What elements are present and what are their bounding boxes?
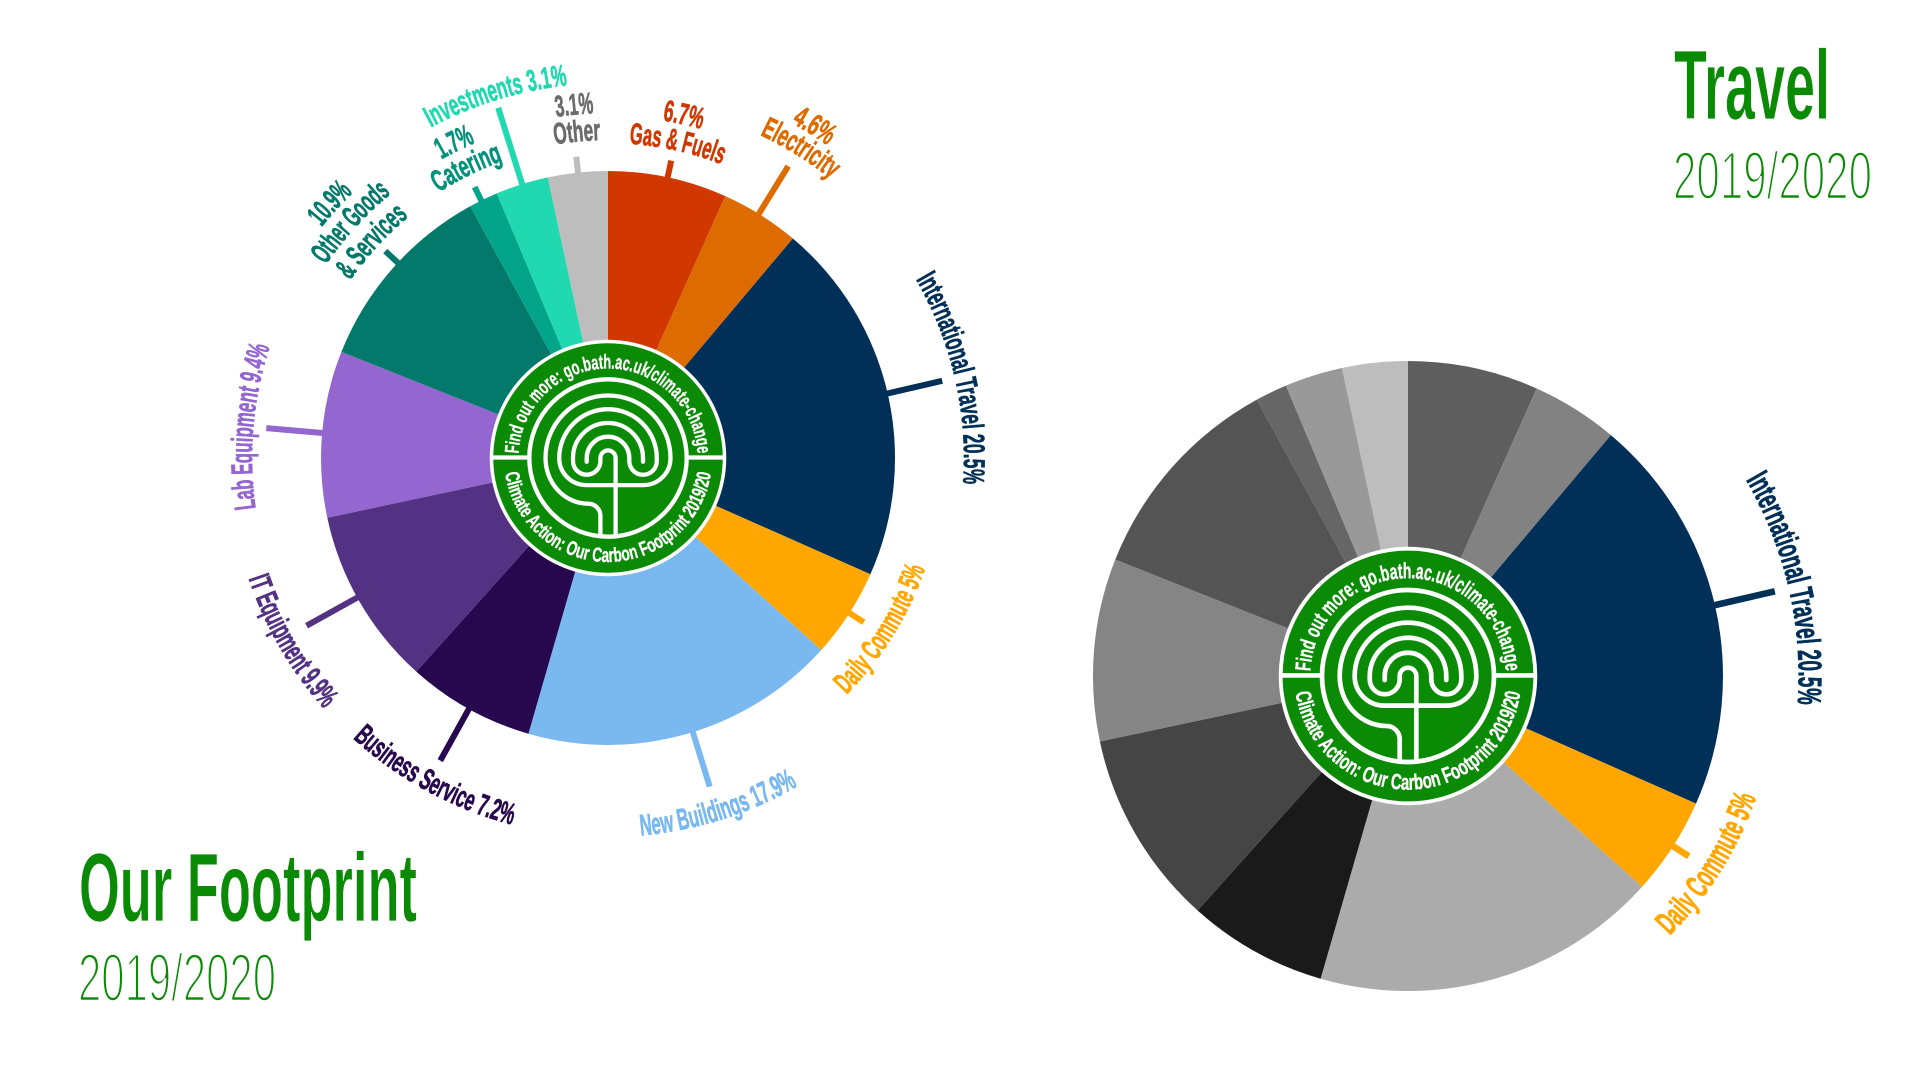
label: other: Other — [554, 120, 600, 144]
tick: daily commute — [848, 612, 864, 622]
badge disc — [1281, 549, 1535, 803]
label: international travel: International Travel 20.5% — [916, 270, 986, 484]
slice: lab equipment — [321, 352, 608, 518]
slice: investments — [497, 177, 608, 458]
label: electricity: 4.6% — [794, 107, 837, 144]
label: gas and fuels: 6.7% — [664, 100, 704, 129]
slice: business service grey — [1198, 676, 1408, 979]
subtitle: 2019/2020 left: 2019/2020 — [78, 940, 276, 1016]
slice: other goods grey — [1115, 400, 1408, 676]
tick: investments — [498, 108, 523, 186]
labels and ticks: our footprint — [230, 64, 986, 836]
tick: daily commute — [1671, 845, 1689, 856]
label: catering: Catering — [430, 146, 503, 190]
slice: electricity — [608, 196, 793, 458]
slice: investments grey — [1286, 368, 1408, 676]
title: Our Footprint: Our Footprint — [79, 833, 417, 942]
slice: electricity grey — [1408, 388, 1611, 676]
tick: international travel — [886, 381, 942, 394]
slice: daily commute — [608, 458, 870, 650]
tick: electricity — [758, 166, 788, 216]
badge: right labyrinth roundel — [1278, 546, 1538, 806]
slice: other grey — [1342, 361, 1408, 676]
label: investments: Investments 3.1% — [422, 64, 567, 128]
labyrinth icon — [493, 379, 723, 537]
slice: daily commute — [1408, 676, 1696, 887]
slice: international travel — [1408, 435, 1723, 804]
chart: our footprint donut — [321, 171, 895, 745]
label: gas and fuels: Gas & Fuels — [630, 123, 726, 164]
label: other goods and services: Other Goods — [311, 183, 390, 262]
labels and ticks: travel — [1654, 469, 1822, 936]
label: catering — [430, 124, 503, 190]
tick: other goods and services — [385, 251, 399, 264]
slice: new buildings grey — [1321, 676, 1642, 991]
badge disc — [492, 342, 724, 574]
tick: catering — [475, 187, 482, 202]
badge text bottom: Climate Action: Our Carbon Footprint 2019/20 — [506, 472, 711, 562]
label: business service: Business Service 7.2% — [353, 723, 516, 824]
label: other: 3.1% — [554, 92, 594, 117]
label: other — [554, 92, 600, 144]
slice: other — [548, 171, 608, 458]
slice: other goods and services — [341, 206, 608, 458]
slice: international travel — [608, 238, 895, 574]
slice: new buildings — [528, 458, 821, 745]
slice: gas and fuels — [608, 171, 725, 458]
slice: business service — [416, 458, 608, 734]
tick: lab equipment — [266, 428, 324, 433]
label: lab equipment: Lab Equipment 9.4% — [230, 343, 270, 510]
slice: IT equipment — [327, 458, 608, 672]
slice: IT equipment grey — [1100, 676, 1408, 910]
label: daily commute: Daily Commute 5% — [1654, 792, 1756, 936]
label: international travel: International Travel 20.5% — [1746, 469, 1822, 704]
tick: new buildings — [692, 730, 710, 787]
slice: catering grey — [1257, 386, 1408, 676]
label: catering: 1.7% — [434, 124, 474, 160]
badge text top: Find out more: go.bath.ac.uk/climate-change — [504, 354, 708, 454]
label: gas and fuels — [630, 100, 726, 164]
badge text top: Find out more: go.bath.ac.uk/climate-change — [1295, 562, 1518, 671]
label: IT equipment: IT Equipment 9.9% — [248, 572, 338, 708]
tick: business service — [440, 707, 470, 761]
slice: gas and fuels grey — [1408, 361, 1537, 676]
slice: catering — [470, 193, 608, 458]
tick: IT equipment — [307, 597, 359, 626]
tick: gas and fuels — [667, 161, 671, 179]
chart: travel donut — [1093, 361, 1723, 991]
slice: lab equipment grey — [1093, 560, 1408, 742]
tick: other — [576, 157, 578, 175]
label: other goods and services: 10.9% — [308, 180, 352, 227]
label: other goods and services: & Services — [336, 206, 407, 278]
badge: left labyrinth roundel — [490, 340, 726, 576]
label: daily commute: Daily Commute 5% — [832, 564, 925, 694]
label: electricity: Electricity — [760, 116, 841, 180]
tick: international travel — [1713, 591, 1775, 606]
labyrinth icon — [1282, 590, 1534, 762]
label: new buildings: New Buildings 17.9% — [640, 768, 796, 836]
badge text bottom: Climate Action: Our Carbon Footprint 2019/20 — [1296, 691, 1520, 790]
